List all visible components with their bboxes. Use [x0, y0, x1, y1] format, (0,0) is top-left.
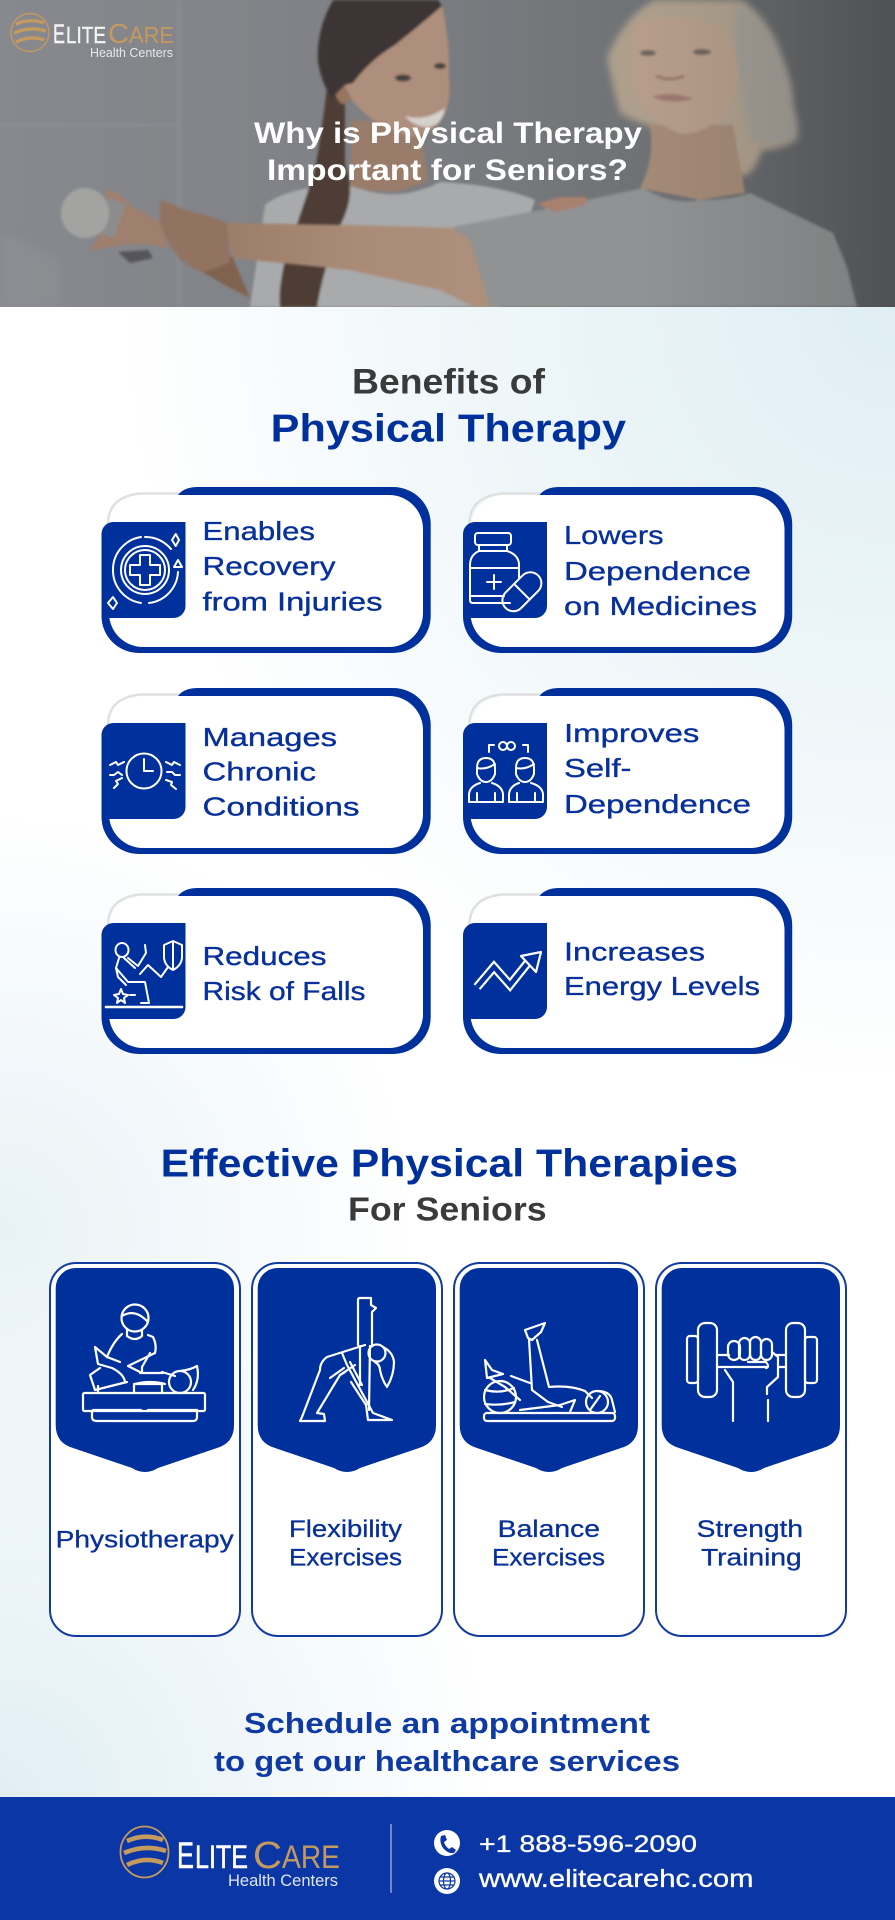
benefit card: improves self-dependence: Self- [564, 753, 632, 783]
website: www.elitecarehc.com [478, 1865, 754, 1893]
benefit card: increases energy levels: Energy Levels [564, 971, 760, 1001]
therapy card: strength training [656, 1263, 846, 1636]
label: Increases [564, 937, 705, 967]
call to action: to get our healthcare services [214, 1746, 680, 1778]
therapy card: strength training: Training [701, 1545, 802, 1572]
icon: therapist and patient [83, 1304, 205, 1421]
logo top: Health Centers [90, 46, 173, 60]
heading: benefits [271, 362, 626, 451]
icon: medical cross with rings [108, 534, 182, 609]
therapy card: flexibility exercises [252, 1263, 442, 1636]
icon: exercise on ball [484, 1323, 615, 1421]
therapy card: balance exercises: Exercises [492, 1545, 605, 1572]
label: Improves [564, 718, 699, 748]
icon: fist with dumbbell [687, 1323, 817, 1421]
nurse neck [350, 120, 428, 192]
icon: person falling with shield [106, 941, 182, 1007]
senior shirt [453, 188, 857, 307]
benefit card: improves self-dependence: Dependence [564, 789, 751, 819]
label: Lowers [564, 520, 664, 550]
label: Physiotherapy [56, 1527, 235, 1554]
logo top: C [108, 18, 129, 49]
label: Strength [697, 1516, 803, 1543]
logo top [11, 14, 174, 60]
nurse forearm [178, 256, 250, 298]
benefit card: manages chronic conditions: Conditions [202, 792, 360, 822]
heading: effective therapies: For Seniors [348, 1192, 547, 1229]
logo wordmark: E [53, 19, 65, 49]
footer logo: ARE [282, 1839, 340, 1875]
benefit card: lowers dependence on medicines: on Medicines [564, 591, 757, 621]
footer logo: Health Centers [228, 1871, 338, 1890]
benefit card: lowers dependence on medicines [463, 487, 792, 653]
benefit card: improves self-dependence [463, 688, 792, 854]
senior facial features [640, 50, 656, 56]
benefit card: recovery from injuries [102, 487, 431, 653]
title: Why is Physical Therapy [254, 117, 642, 150]
nurse hand on shoulder [537, 197, 587, 212]
icon: yoga pose [300, 1298, 394, 1421]
nurse eyes and smile [395, 74, 411, 82]
label: Balance [498, 1516, 600, 1543]
therapy card: balance exercises [454, 1263, 644, 1636]
benefit card: increases energy levels [463, 888, 792, 1054]
heading: effective therapies [161, 1143, 738, 1229]
senior arm [225, 223, 490, 307]
benefit card: recovery from injuries: Recovery [202, 551, 336, 581]
heading: benefits: Benefits of [352, 362, 545, 401]
senior hand [90, 190, 168, 251]
senior face [630, 17, 737, 134]
benefit card: reduces risk of falls: Risk of Falls [202, 976, 366, 1006]
header photo banner [0, 0, 895, 307]
call to action [214, 1708, 680, 1778]
senior hair [607, 0, 798, 177]
logo wordmark: E [177, 1835, 194, 1876]
title: Important for Seniors? [267, 154, 628, 187]
title [254, 117, 642, 187]
heading: effective therapies: Effective Physical Therapies [161, 1143, 738, 1186]
nurse face [345, 6, 450, 136]
icon: two people linked [469, 742, 543, 802]
phone number: +1 888-596-2090 [479, 1831, 697, 1858]
nurse ear [334, 85, 352, 106]
icon: clock [110, 754, 180, 789]
benefit card: manages chronic conditions [102, 688, 431, 854]
nurse hand on wrist [160, 200, 230, 272]
label: Reduces [202, 941, 326, 971]
benefit card: lowers dependence on medicines: Dependence [564, 556, 751, 586]
label: Flexibility [289, 1516, 403, 1543]
icon: phone [434, 1830, 460, 1856]
icon: bottle and pill [470, 533, 546, 616]
label: Enables [202, 516, 315, 546]
nurse shirt [250, 182, 535, 307]
icon: zigzag rising arrow [477, 952, 541, 987]
nurse ponytail [280, 80, 350, 307]
senior neck [640, 125, 745, 200]
footer logo [120, 1826, 340, 1890]
logo top: LITE [66, 22, 106, 48]
therapy card: flexibility exercises: Exercises [289, 1545, 402, 1572]
dumbbell [101, 197, 126, 238]
call to action: Schedule an appointment [244, 1708, 651, 1740]
therapy card: physiotherapy [50, 1263, 240, 1636]
heading: benefits: Physical Therapy [271, 408, 626, 451]
benefit card: reduces risk of falls [102, 888, 431, 1054]
logo mark [11, 14, 49, 52]
logo mark [120, 1826, 168, 1878]
label: Manages [202, 722, 337, 752]
footer logo: LITE [195, 1839, 248, 1875]
logo top: ARE [129, 22, 174, 48]
benefit card: recovery from injuries: from Injuries [202, 587, 382, 617]
footer logo: C [253, 1835, 282, 1877]
benefit card: manages chronic conditions: Chronic [202, 757, 316, 787]
icon: globe [434, 1868, 460, 1894]
nurse hair [318, 0, 442, 98]
footer band [0, 1797, 895, 1920]
